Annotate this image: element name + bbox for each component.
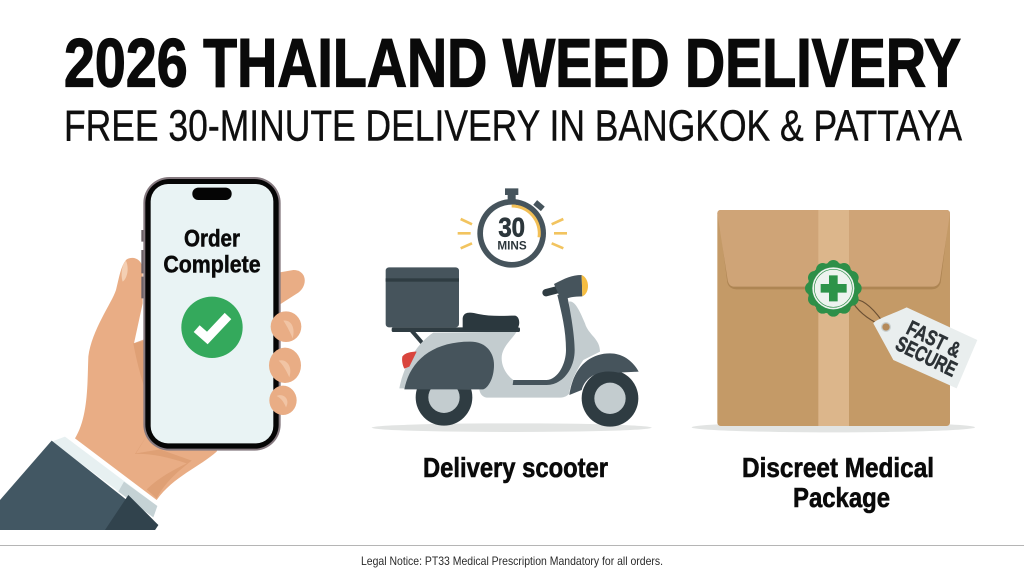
label line one: Discreet Medical [742, 452, 934, 483]
handlebar grip [546, 287, 567, 293]
phone notch [192, 188, 232, 200]
hand palm [75, 258, 233, 500]
tag string [853, 299, 886, 327]
phone bezel [145, 179, 279, 449]
phone frame [143, 177, 281, 451]
leg shield frame [513, 293, 575, 385]
check badge [181, 297, 243, 358]
tag text line two: SECURE [892, 332, 961, 382]
cuff shaded end [118, 482, 157, 517]
side finger behind phone [278, 270, 305, 304]
flap shadow [718, 213, 949, 289]
timer progress arc [512, 206, 539, 237]
label: delivery scooter: Delivery scooter [423, 452, 608, 483]
front fender [569, 353, 639, 395]
timer side button [533, 200, 545, 211]
phone side buttons [141, 230, 144, 298]
package shadow [692, 422, 975, 432]
label line two: Package [793, 482, 890, 513]
delivery box [386, 267, 459, 327]
ground shadow [372, 423, 652, 432]
tag text line one: FAST & [903, 316, 965, 363]
illustration: medical package [692, 210, 977, 432]
label: discreet medical package [742, 452, 934, 513]
timer rays [458, 219, 567, 248]
shirt cuff [52, 437, 157, 517]
sleeve fold [105, 495, 158, 530]
jacket sleeve [0, 441, 158, 530]
hand shadow [133, 339, 192, 498]
scooter body [399, 302, 600, 398]
rear fender [404, 342, 494, 389]
thumb nail [122, 261, 128, 282]
timer crown [505, 188, 518, 202]
illustration: scooter and timer [372, 188, 652, 432]
front wheel [582, 370, 638, 427]
tag [873, 307, 977, 388]
timer unit: MINS [497, 239, 527, 253]
seat [463, 313, 519, 330]
headlight lens [582, 275, 588, 296]
tail light [402, 352, 417, 369]
timer ring [477, 199, 546, 268]
order word: Order [184, 226, 240, 253]
headlight housing [554, 275, 582, 302]
timer number: 30 [498, 213, 525, 243]
phone screen [151, 184, 273, 443]
rear wheel [416, 369, 472, 426]
phone [141, 177, 281, 451]
package tape [818, 210, 849, 426]
legal notice: Legal Notice: PT33 Medical Prescription Mandatory for all orders. [361, 554, 663, 568]
complete word: Complete [163, 251, 261, 278]
timer [477, 188, 546, 268]
package box [717, 210, 950, 426]
fingers [269, 311, 301, 415]
rack [392, 327, 520, 332]
rack support [412, 331, 424, 345]
package flap [717, 210, 950, 287]
order complete text [163, 226, 261, 278]
timer face [483, 205, 540, 262]
illustration: hand holding phone [0, 177, 305, 530]
medical seal [805, 260, 862, 317]
